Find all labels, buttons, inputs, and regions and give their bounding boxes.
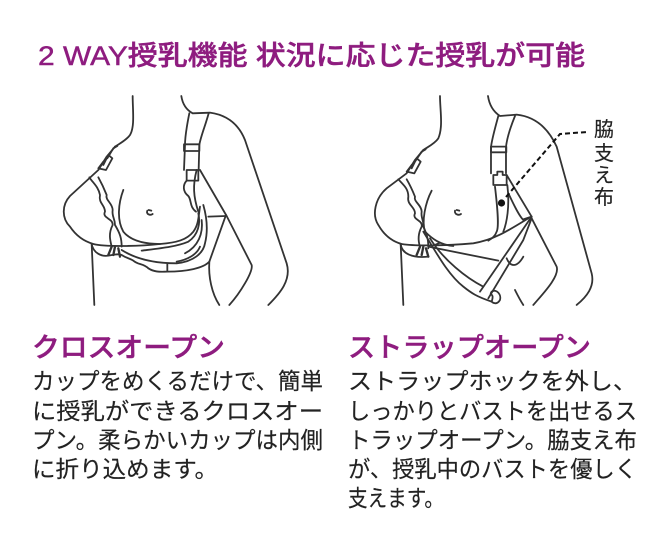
- text block: strap open description: [348, 368, 637, 511]
- text block: strap open description: 支えます。: [348, 485, 444, 511]
- text block: cross open description: [32, 368, 323, 482]
- callout: leader line and dot: [498, 132, 587, 207]
- callout label: vertical text: 布: [594, 186, 614, 209]
- callout label: vertical text: 脇: [594, 118, 614, 141]
- text block: strap open description: が、授乳中のバストを優しく: [348, 456, 637, 482]
- heading: strap open: ストラップオープン: [348, 333, 591, 363]
- text block: strap open description: ストラップホックを外し、: [348, 368, 637, 394]
- text block: strap open description: しっかりとバストを出せるス: [348, 398, 637, 424]
- heading: cross open: クロスオープン: [32, 333, 225, 363]
- callout label: vertical text: え: [594, 165, 614, 187]
- text block: cross open description: に折り込めます。: [32, 456, 218, 482]
- text block: cross open description: カップをめくるだけで、簡単: [32, 368, 323, 394]
- callout label: vertical text: [594, 118, 614, 209]
- illustration: cross open: [64, 96, 288, 305]
- text block: cross open description: に授乳ができるクロスオー: [32, 398, 323, 424]
- callout label: vertical text: 支: [594, 142, 614, 165]
- text block: cross open description: プン。柔らかいカップは内側: [32, 427, 323, 453]
- text block: strap open description: トラップオープン。脇支え布: [348, 427, 637, 453]
- illustration: strap open: [375, 96, 592, 305]
- title: 2 WAY授乳機能 状況に応じた授乳が可能: [38, 41, 585, 71]
